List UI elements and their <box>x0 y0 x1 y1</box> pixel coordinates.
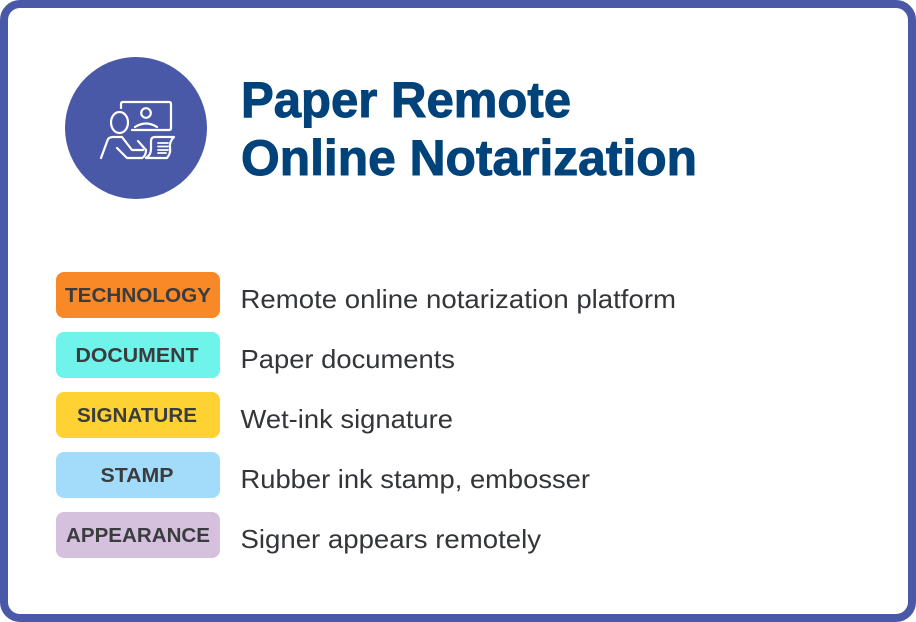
row: signature <box>56 392 453 438</box>
badge: appearance <box>56 512 220 558</box>
row: appearance <box>56 512 541 558</box>
title: Online Notarization <box>241 130 697 186</box>
text: appearance description: Signer appears remotely <box>240 524 541 554</box>
title: Paper Remote <box>241 72 571 128</box>
badge: technology <box>56 272 220 318</box>
badge: document: DOCUMENT <box>76 345 198 367</box>
badge: document <box>56 332 220 378</box>
row: stamp <box>56 452 590 498</box>
row: technology <box>56 272 676 318</box>
text: document description: Paper documents <box>240 344 455 374</box>
badge: signature: SIGNATURE <box>77 405 197 427</box>
badge: stamp <box>56 452 220 498</box>
title <box>241 72 697 186</box>
row: document <box>56 332 455 378</box>
badge: signature <box>56 392 220 438</box>
badge: stamp: STAMP <box>100 465 174 487</box>
text: signature description: Wet-ink signature <box>240 404 453 434</box>
text: stamp description: Rubber ink stamp, embosser <box>240 464 590 494</box>
badge: technology: TECHNOLOGY <box>65 285 212 307</box>
text: technology description: Remote online notarization platform <box>240 284 676 314</box>
badge: appearance: APPEARANCE <box>66 525 210 547</box>
icon: remote notarization <box>65 57 207 199</box>
